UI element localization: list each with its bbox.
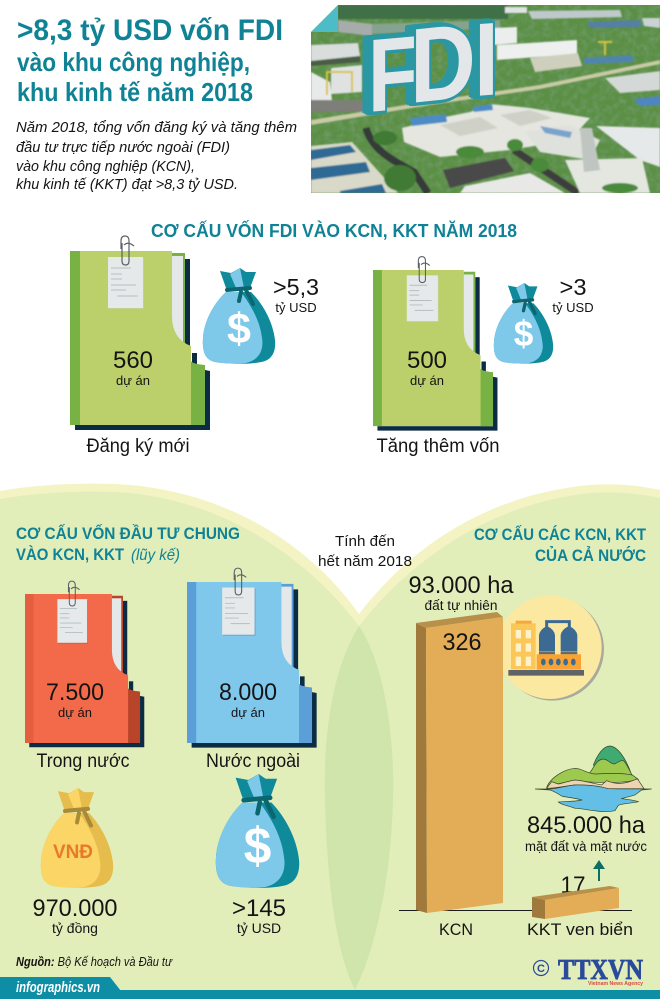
heading: structure of zones [474, 525, 647, 565]
title: khu kinh tế năm 2018 [17, 77, 253, 107]
folder: green [70, 236, 210, 430]
label: Tăng thêm vốn [376, 436, 500, 457]
time note [318, 533, 412, 570]
value: >5.3 billion USD: >5,3 [273, 274, 319, 300]
source: Nguồn: Bộ Kế hoạch và Đầu tư [16, 954, 173, 969]
logo: TTXVN: Vietnam News Agency [588, 981, 643, 987]
value: >3 billion USD: tỷ USD [552, 300, 594, 315]
time note: hết năm 2018 [318, 553, 412, 570]
website label: infographics.vn [16, 979, 100, 996]
icon: money bag [203, 268, 275, 364]
intro text: khu kinh tế (KKT) đạt >8,3 tỷ USD. [16, 176, 238, 193]
value: 8,000 projects: 8.000 [219, 679, 277, 706]
value: >3 billion USD [552, 274, 594, 315]
value: 845,000 ha land and water: mặt đất và mặt nước [525, 839, 647, 854]
title [17, 14, 283, 107]
arrow [593, 860, 605, 881]
panel: additional capital [373, 257, 594, 457]
panel: foreign [187, 568, 317, 936]
value: 560 projects [113, 347, 153, 388]
title: >8,3 tỷ USD vốn FDI [17, 14, 283, 47]
value: 500 projects: 500 [407, 347, 447, 374]
panel: new registration [70, 236, 319, 457]
logo: TTXVN: C [537, 963, 545, 975]
value: 17: 17 [560, 872, 586, 899]
icon: money bag: $ [514, 314, 533, 354]
bar: KKT [532, 886, 619, 919]
folder: red [25, 581, 144, 747]
value: 845,000 ha land and water: 845.000 ha [527, 812, 646, 839]
icon: island [535, 746, 652, 812]
value: 93,000 ha natural land: đất tự nhiên [424, 598, 498, 613]
icon: VND money bag: VNĐ [53, 842, 93, 863]
icon: VND money bag [41, 788, 113, 888]
value: >5.3 billion USD: tỷ USD [275, 300, 317, 315]
corner fold [311, 5, 338, 32]
heading: general investment structure: (lũy kế) [131, 547, 180, 564]
icon: money bag [494, 283, 553, 364]
value: 93,000 ha natural land [408, 572, 514, 613]
intro text: đầu tư trực tiếp nước ngoài (FDI) [16, 139, 230, 156]
value: 500 projects [407, 347, 447, 388]
label: Trong nước [36, 751, 130, 772]
heading: general investment structure [16, 523, 240, 564]
value: 93,000 ha natural land: 93.000 ha [408, 572, 514, 599]
value: 7,500 projects: dự án [58, 705, 92, 720]
value: >5.3 billion USD [273, 274, 319, 315]
value: >145 billion USD: tỷ USD [237, 920, 281, 936]
heading: general investment structure: CƠ CẤU VỐN ĐẦU TƯ CHUNG [16, 523, 240, 543]
value: 326: 326 [442, 629, 482, 656]
background domes [0, 484, 660, 990]
folder: blue [187, 568, 317, 748]
icon: USD money bag: $ [244, 816, 271, 874]
value: >3 billion USD: >3 [560, 274, 586, 300]
intro text: vào khu công nghiệp (KCN), [16, 158, 195, 175]
value: 970,000 billion VND: 970.000 [32, 895, 118, 922]
axis labels: KCN [439, 920, 473, 939]
value: 845,000 ha land and water [525, 812, 647, 854]
icon: factory [498, 596, 604, 701]
heading: structure of zones: CỦA CẢ NƯỚC [535, 546, 646, 565]
photo: industrial park with FDI letters [311, 0, 660, 193]
bottom bar [0, 977, 660, 999]
value: 500 projects: dự án [410, 373, 444, 388]
axis labels [439, 920, 633, 939]
FDI 3D letters: F [368, 13, 418, 134]
overlap lens [325, 626, 393, 990]
icon: USD money bag [216, 774, 299, 888]
FDI 3D letters [362, 18, 495, 116]
value: 8,000 projects: dự án [231, 705, 265, 720]
value: 7,500 projects [46, 679, 104, 720]
heading: general investment structure: VÀO KCN, KKT [16, 545, 125, 564]
panel: domestic [25, 581, 144, 936]
value: >145 billion USD [232, 895, 286, 936]
value: 970,000 billion VND [32, 895, 118, 936]
label: Nước ngoài [206, 751, 300, 772]
logo: TTXVN [534, 954, 643, 987]
label: Đăng ký mới [86, 436, 190, 457]
bar: KCN [416, 612, 503, 913]
value: 8,000 projects [219, 679, 277, 720]
title: vào khu công nghiệp, [17, 47, 250, 77]
section heading: FDI structure: CƠ CẤU VỐN FDI VÀO KCN, KKT NĂM 2018 [151, 220, 517, 241]
FDI 3D letters: D [410, 0, 476, 125]
value: 560 projects: dự án [116, 373, 150, 388]
logo: TTXVN: TTXVN [558, 954, 643, 986]
intro text [16, 119, 297, 193]
value: 7,500 projects: 7.500 [46, 679, 104, 706]
icon: money bag: $ [227, 305, 251, 353]
axis [399, 910, 632, 912]
time note: Tính đến [335, 533, 395, 550]
value: 560 projects: 560 [113, 347, 153, 374]
intro text: Năm 2018, tổng vốn đăng ký và tăng thêm [16, 119, 297, 136]
folder: green [373, 257, 497, 431]
value: 970,000 billion VND: tỷ đồng [52, 920, 98, 936]
axis labels: KKT ven biển [527, 920, 633, 939]
value: >145 billion USD: >145 [232, 895, 286, 922]
FDI 3D letters: I [474, 0, 499, 118]
